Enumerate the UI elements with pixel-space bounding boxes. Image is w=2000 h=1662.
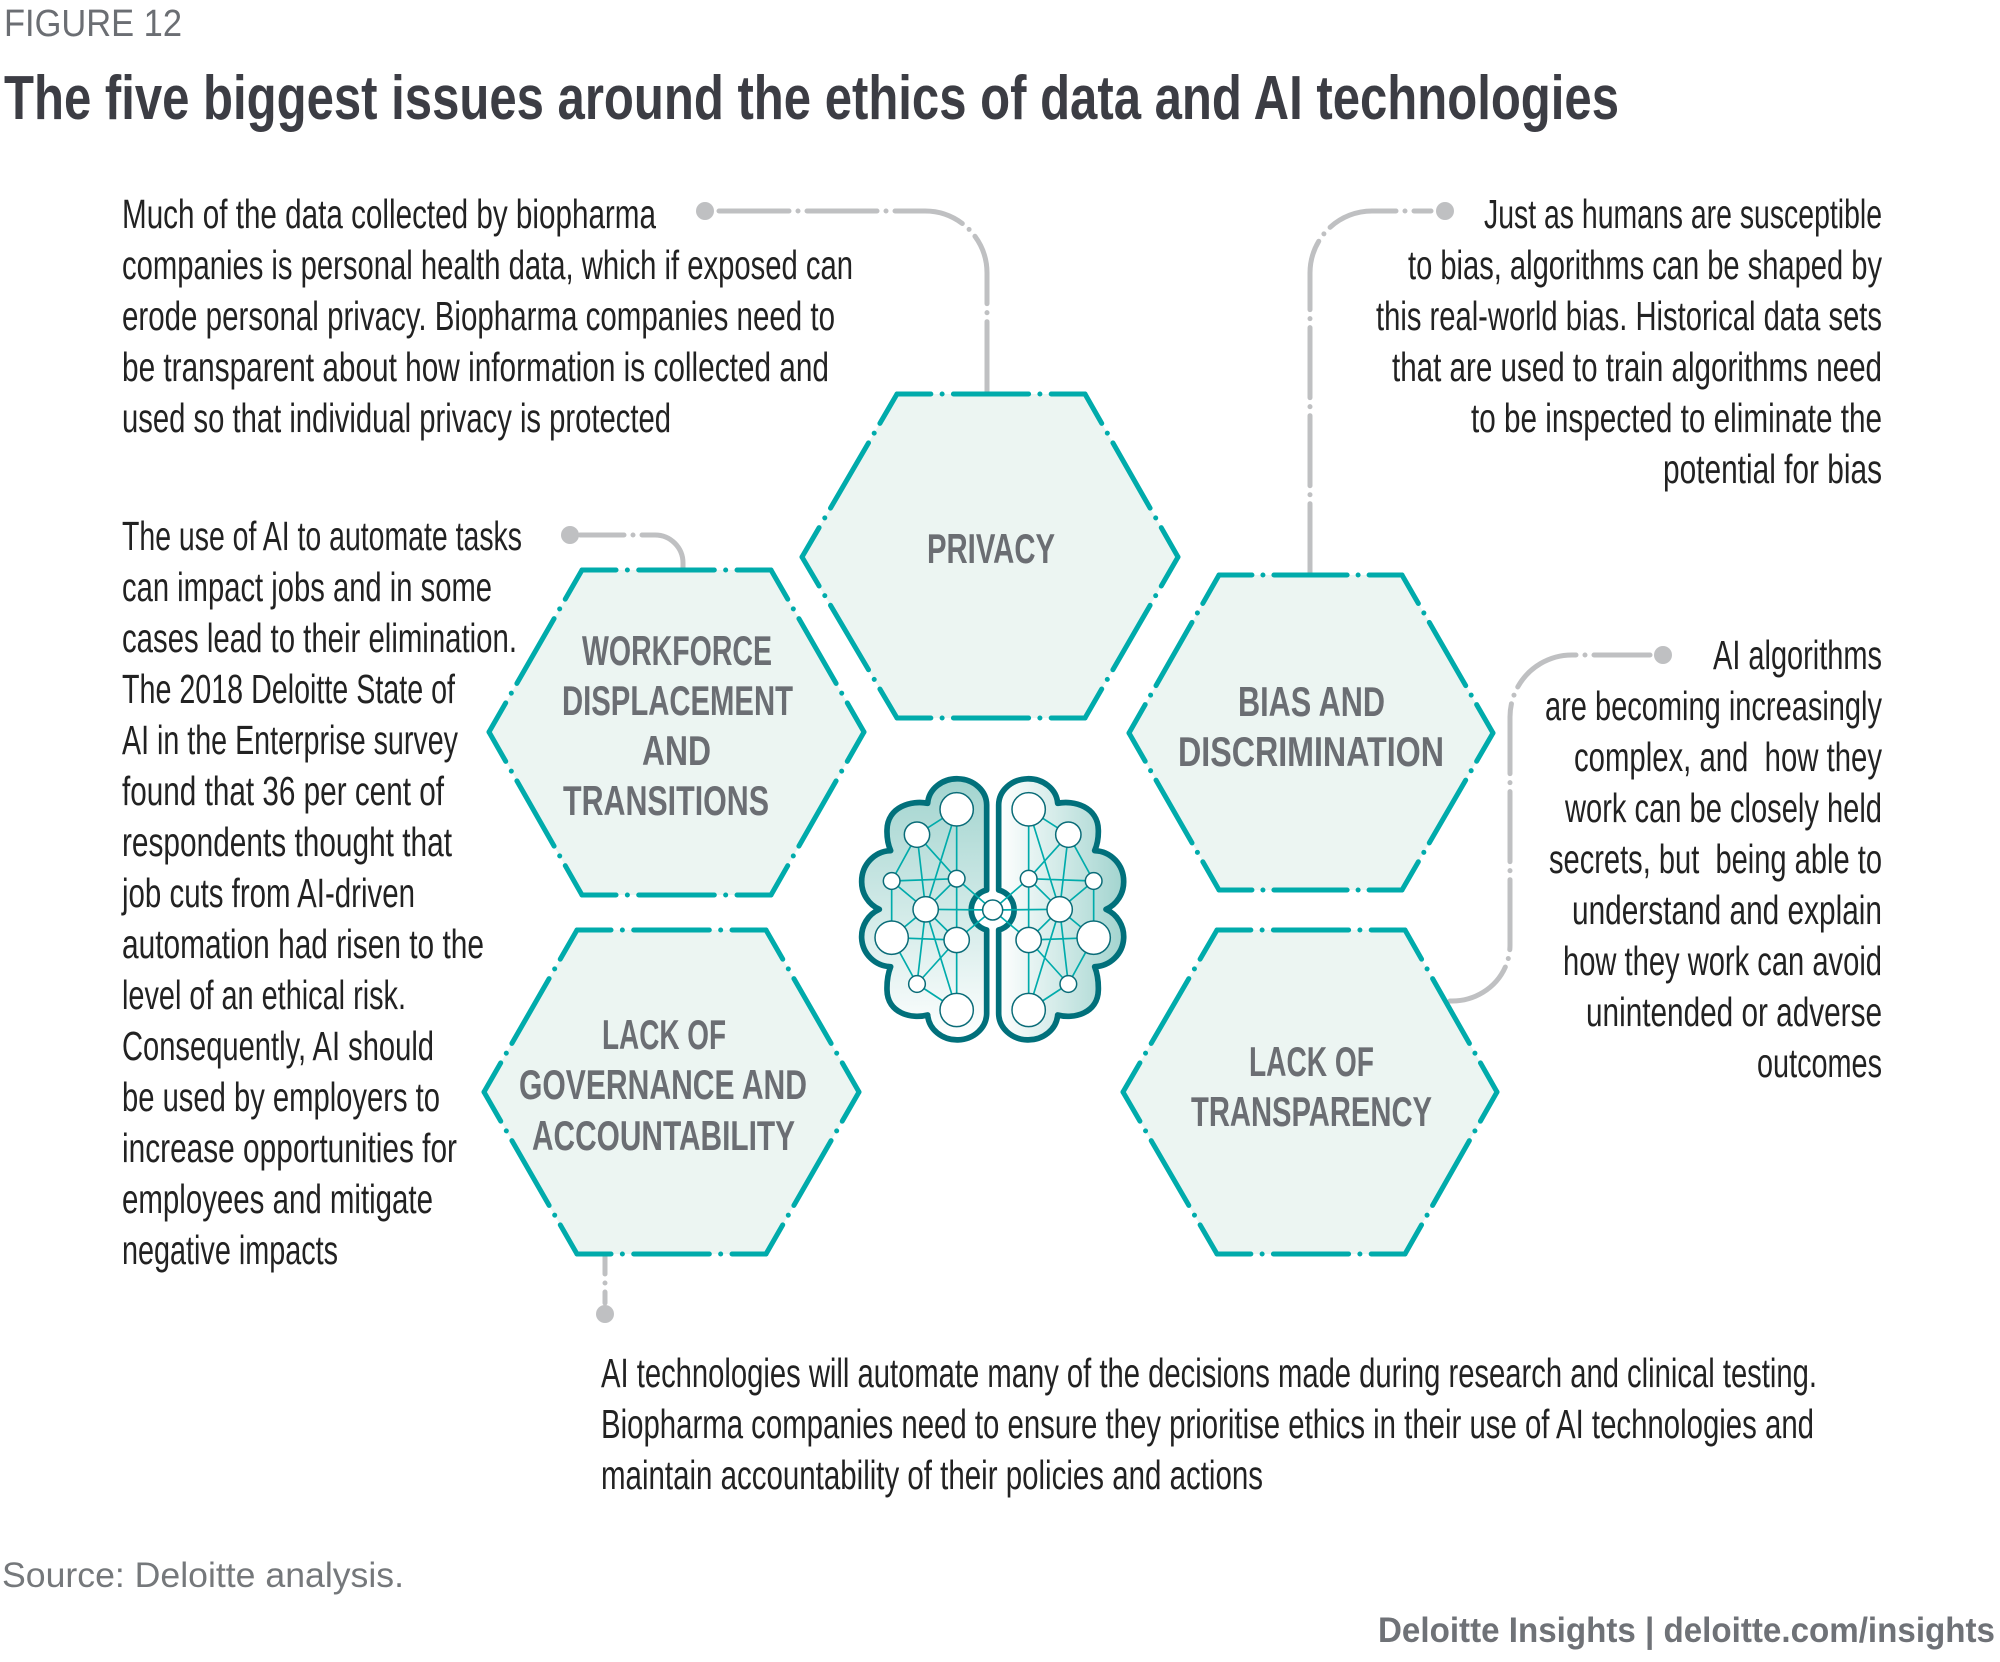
hexagon: workforce displacement and transitions (489, 570, 864, 895)
text block: lack of transparency: how they work can avoid (1563, 938, 1882, 984)
text block: workforce displacement: job cuts from AI-driven (121, 870, 415, 916)
central node (983, 900, 1003, 920)
left hemisphere (862, 779, 993, 1040)
text block: governance and accountability (601, 1350, 1817, 1498)
text block: lack of transparency: complex, and how they (1574, 734, 1882, 780)
icon: brain network (862, 779, 1124, 1040)
hexagon: workforce displacement and transitions: AND (642, 727, 711, 774)
hexagon: bias and discrimination (1129, 575, 1493, 890)
text block: privacy (122, 191, 853, 441)
text block: workforce displacement: The 2018 Deloitte State of (122, 666, 455, 712)
hexagon: workforce displacement and transitions: DISPLACEMENT (562, 677, 793, 724)
hexagon: lack of transparency: LACK OF (1249, 1038, 1374, 1085)
text block: lack of transparency: outcomes (1757, 1040, 1882, 1086)
connector: privacy (696, 202, 987, 394)
text block: privacy: be transparent about how information is collected and (122, 344, 829, 390)
connector: transparency (1450, 646, 1672, 1001)
right hemisphere (993, 779, 1124, 1040)
title: The five biggest issues around the ethics of data and AI technologies (4, 64, 1619, 133)
connector: bias (1310, 202, 1454, 575)
text block: governance and accountability: maintain accountability of their policies and actions (601, 1452, 1263, 1498)
hexagon: privacy (802, 394, 1178, 718)
connector: workforce (561, 526, 683, 570)
text block: workforce displacement: be used by employers to (122, 1074, 440, 1120)
text block: lack of transparency: AI algorithms (1713, 632, 1882, 678)
text block: workforce displacement: found that 36 per cent of (122, 768, 444, 814)
text block: privacy: Much of the data collected by biopharma (122, 191, 656, 237)
hexagon: bias and discrimination: DISCRIMINATION (1178, 728, 1444, 775)
hexagon: lack of governance and accountability: GOVERNANCE AND (519, 1061, 807, 1108)
text block: privacy: erode personal privacy. Biopharma companies need to (122, 293, 835, 339)
hexagon: lack of governance and accountability: ACCOUNTABILITY (532, 1112, 795, 1159)
text block: workforce displacement: level of an ethical risk. (122, 972, 406, 1018)
text block: workforce displacement: The use of AI to automate tasks (122, 513, 522, 559)
text block: workforce displacement: negative impacts (122, 1227, 338, 1273)
hexagon: workforce displacement and transitions: TRANSITIONS (563, 777, 769, 824)
hexagon: lack of governance and accountability (484, 930, 859, 1254)
text block: privacy: used so that individual privacy is protected (122, 395, 671, 441)
hexagon: workforce displacement and transitions: WORKFORCE (582, 627, 772, 674)
text block: workforce displacement: increase opportunities for (122, 1125, 457, 1171)
source note: Source: Deloitte analysis. (2, 1556, 404, 1595)
text block: workforce displacement: automation had risen to the (122, 921, 484, 967)
text block: workforce displacement: cases lead to their elimination. (122, 615, 517, 661)
hexagon: lack of governance and accountability: LACK OF (602, 1011, 726, 1058)
text block: lack of transparency: work can be closely held (1564, 785, 1882, 831)
text block: workforce displacement (121, 513, 522, 1273)
text block: workforce displacement: respondents thought that (122, 819, 452, 865)
hexagon: lack of transparency: TRANSPARENCY (1191, 1088, 1432, 1135)
text block: lack of transparency (1545, 632, 1882, 1086)
hexagon: lack of transparency (1123, 930, 1497, 1254)
figure label: FIGURE 12 (4, 3, 182, 45)
text block: workforce displacement: can impact jobs and in some (122, 564, 492, 610)
connector: governance (596, 1255, 614, 1323)
text block: lack of transparency: unintended or adverse (1586, 989, 1882, 1035)
text block: workforce displacement: Consequently, AI should (122, 1023, 434, 1069)
text block: bias and discrimination (1376, 191, 1882, 492)
text block: privacy: companies is personal health data, which if exposed can (122, 242, 853, 288)
text block: workforce displacement: employees and mitigate (122, 1176, 433, 1222)
text block: lack of transparency: understand and explain (1572, 887, 1882, 933)
text block: bias and discrimination: potential for bias (1663, 446, 1882, 492)
text block: workforce displacement: AI in the Enterprise survey (122, 717, 458, 763)
hexagon: bias and discrimination: BIAS AND (1238, 678, 1385, 725)
hexagon: privacy: PRIVACY (927, 525, 1055, 572)
